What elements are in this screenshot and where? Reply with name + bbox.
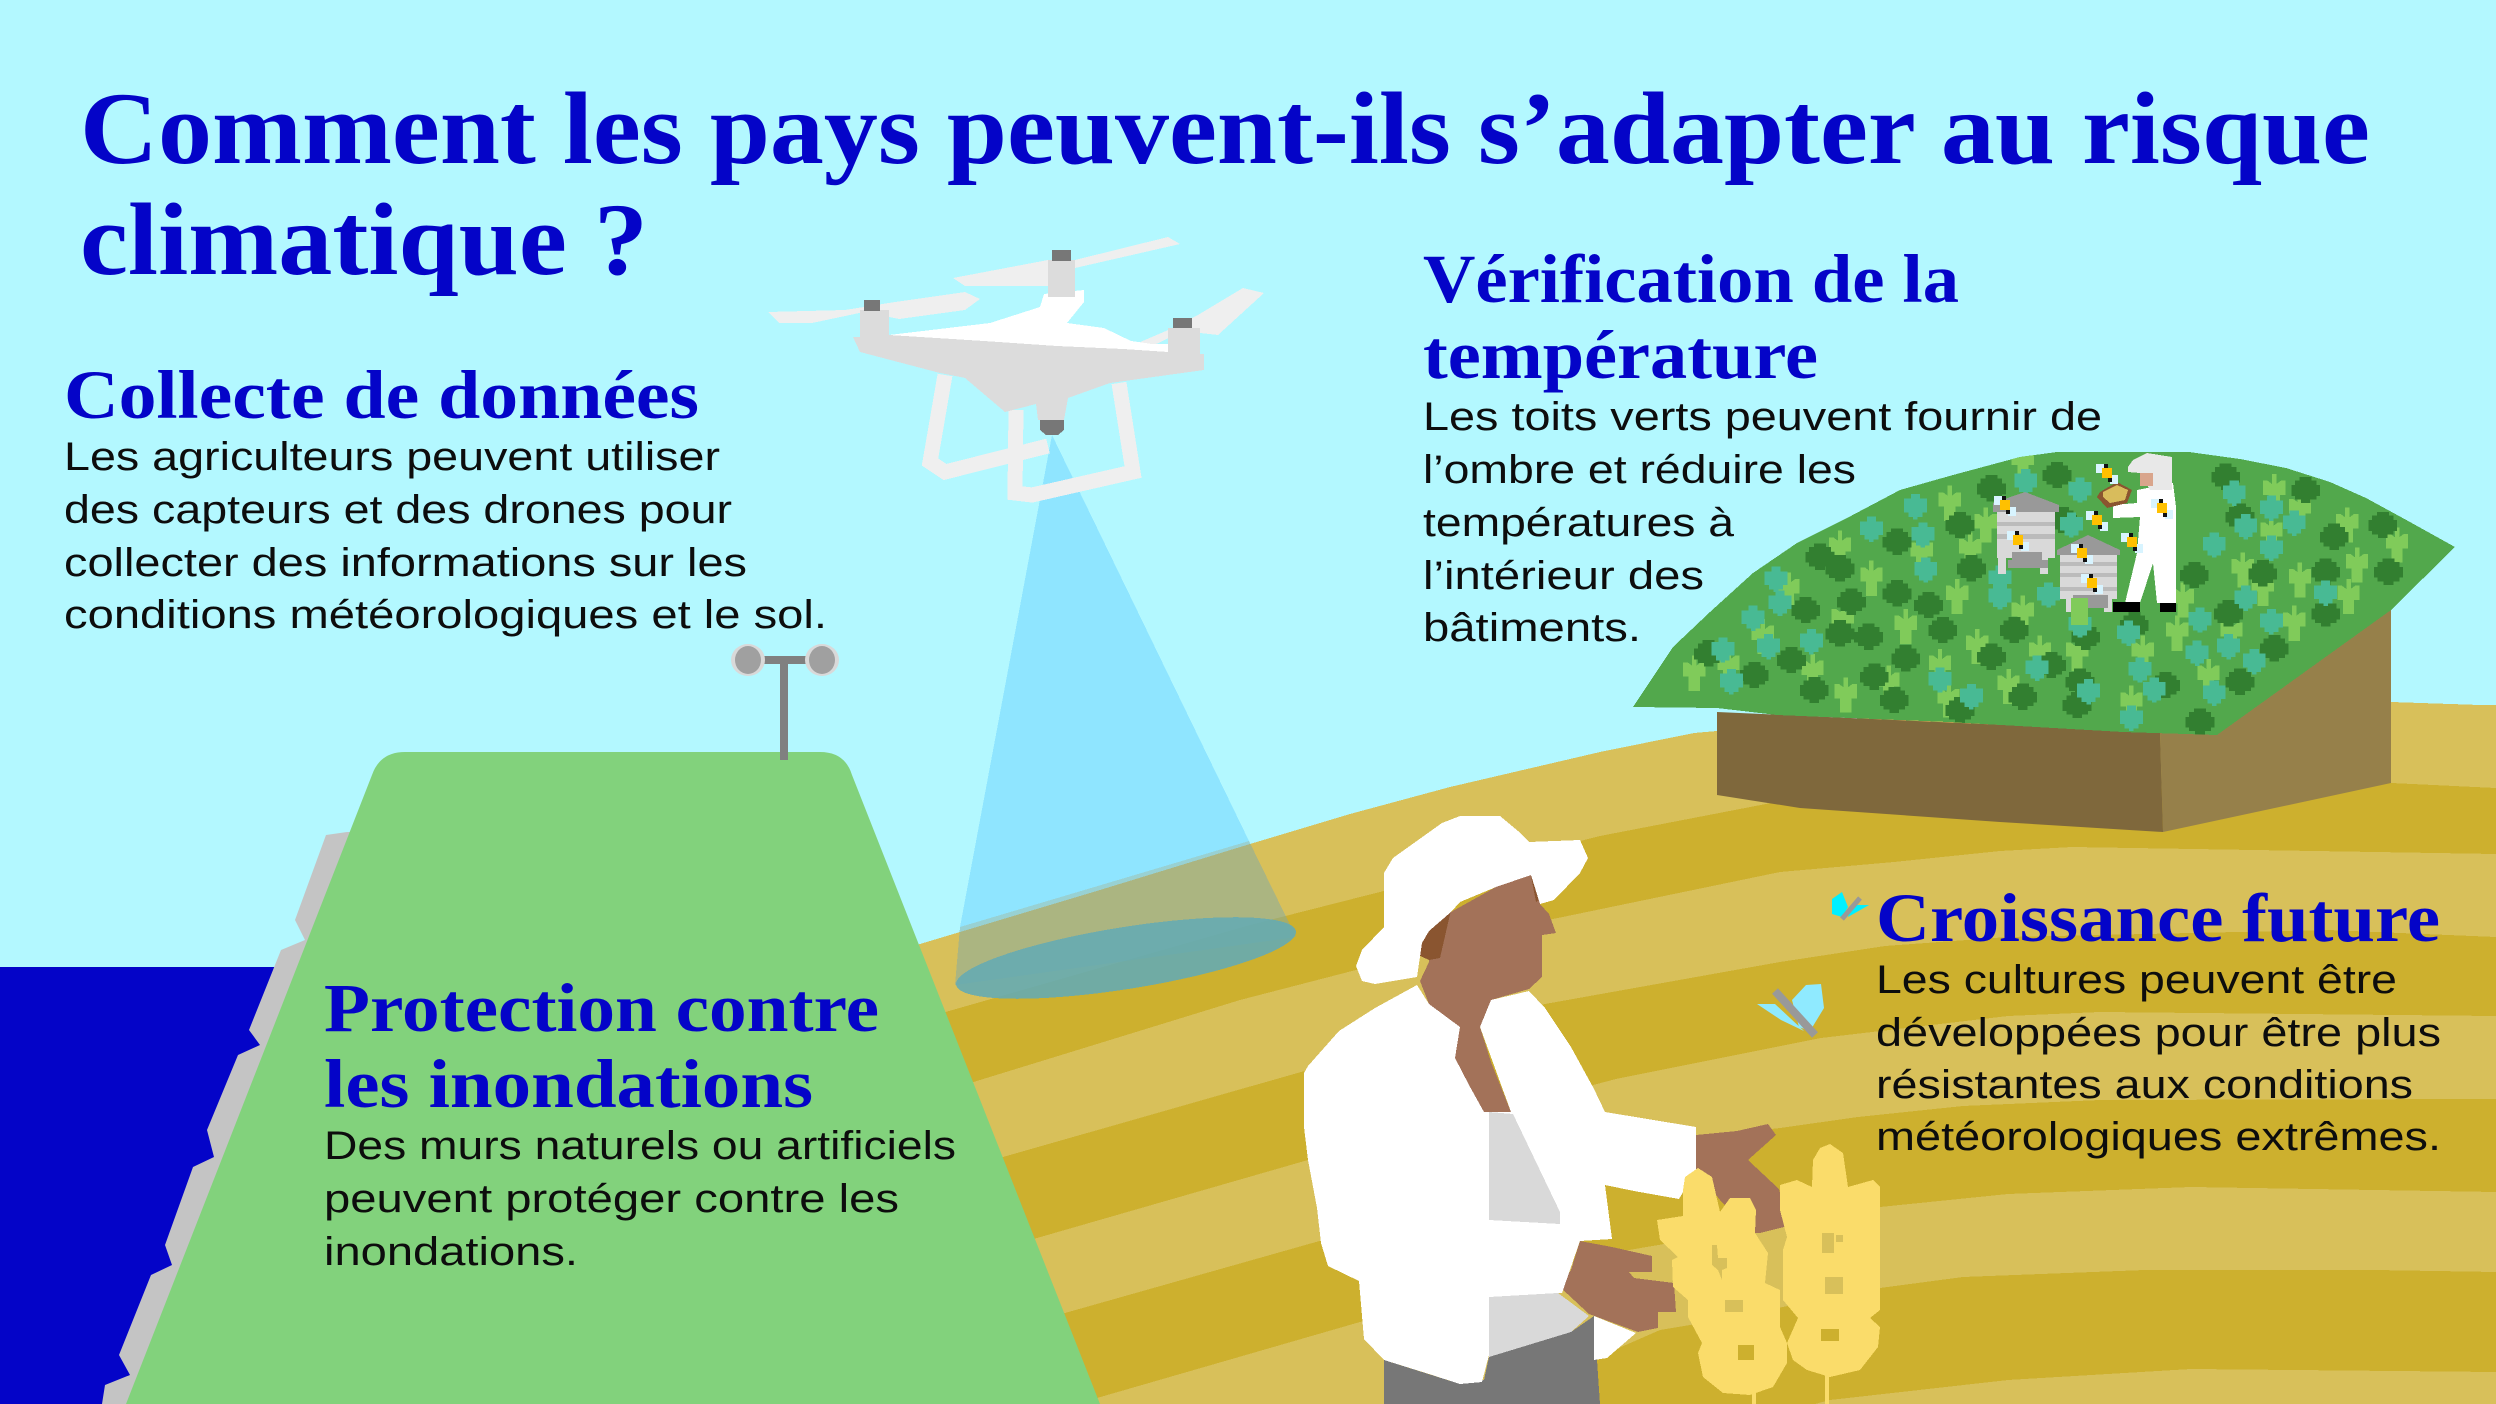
wheat ear right [1780,1144,1880,1377]
sea [0,967,320,1404]
farmer neck and face [1420,875,1556,1112]
body text: conditions météorologiques et le sol. [64,593,827,637]
heading: Collecte de données [64,357,699,433]
icon: weather station [731,644,839,760]
panel: collecte de données [64,357,827,637]
hive left [1993,492,2059,574]
house front wall [1717,712,2163,832]
icon: large butterfly [1757,984,1824,1035]
stone sea wall [102,832,500,1404]
heading: les inondations [324,1046,813,1122]
heading [324,970,879,1122]
body text [1423,395,2102,650]
heading: Protection contre [324,970,879,1046]
farmer hat [1356,816,1588,984]
farmer hair [1416,910,1451,960]
drone top shell [889,290,1168,352]
body text: températures à [1423,501,1735,545]
house side wall [2160,600,2391,832]
heading: Vérification de la [1423,241,1959,317]
drone landing gear [930,375,1133,495]
body text: Les cultures peuvent être [1876,958,2397,1002]
green levee [126,752,1100,1404]
body text: Les toits verts peuvent fournir de [1423,395,2102,439]
farmer [1304,816,1788,1404]
heading [1423,241,1959,393]
drone body [853,335,1204,420]
wheat grain marks [1712,1233,1843,1312]
farmer sleeve and jacket front [1480,991,1696,1297]
body text: peuvent protéger contre les [324,1177,899,1221]
heading: température [1423,317,1818,393]
drone propellers [768,237,1264,346]
body text: l’ombre et réduire les [1423,448,1856,492]
farmer upper hand [1696,1124,1788,1235]
plant in front of hive [2071,598,2088,625]
hive right [2057,535,2120,612]
wheat ear left [1657,1168,1787,1395]
farmer trousers [1384,1316,1600,1404]
heading: Croissance future [1876,880,2440,956]
farmer lower hand [1560,1241,1676,1332]
body text: bâtiments. [1423,606,1641,650]
body text: inondations. [324,1230,578,1274]
beehives [1993,492,2120,612]
body text [324,1124,956,1274]
farmland with stripes [900,702,2496,1404]
farmer undershirt [1489,1112,1560,1224]
body text: météorologiques extrêmes. [1876,1115,2441,1159]
title: climatique ? [80,183,648,297]
drone motors [860,260,1200,357]
body text: Des murs naturels ou artificiels [324,1124,956,1168]
farmer shirt tail [1594,1316,1636,1360]
title: Comment les pays peuvent-ils s’adapter au risque [80,72,2370,186]
bees [1994,464,2173,594]
wheat [1657,1144,1880,1404]
body text [1876,958,2441,1159]
farmer jacket left [1304,985,1489,1384]
body text: résistantes aux conditions [1876,1063,2413,1107]
honeycomb frame [2097,482,2132,508]
title [80,72,2370,297]
body text: l’intérieur des [1423,554,1704,598]
body text: collecter des informations sur les [64,541,747,585]
drone scan beam [951,435,1301,1016]
roof plants [1683,444,2408,735]
icon: small butterfly [1832,892,1869,919]
panel: protection contre les inondations [324,970,956,1274]
beekeeper [2097,453,2176,612]
green roof [1633,452,2455,735]
panel: croissance future [1876,880,2441,1159]
body text: des capteurs et des drones pour [64,488,732,532]
body text [64,435,827,637]
body text: développées pour être plus [1876,1011,2441,1055]
body text: Les agriculteurs peuvent utiliser [64,435,720,479]
panel: vérification de la température [1423,241,2102,650]
drone camera [1040,420,1064,435]
icon: drone [768,237,1264,495]
